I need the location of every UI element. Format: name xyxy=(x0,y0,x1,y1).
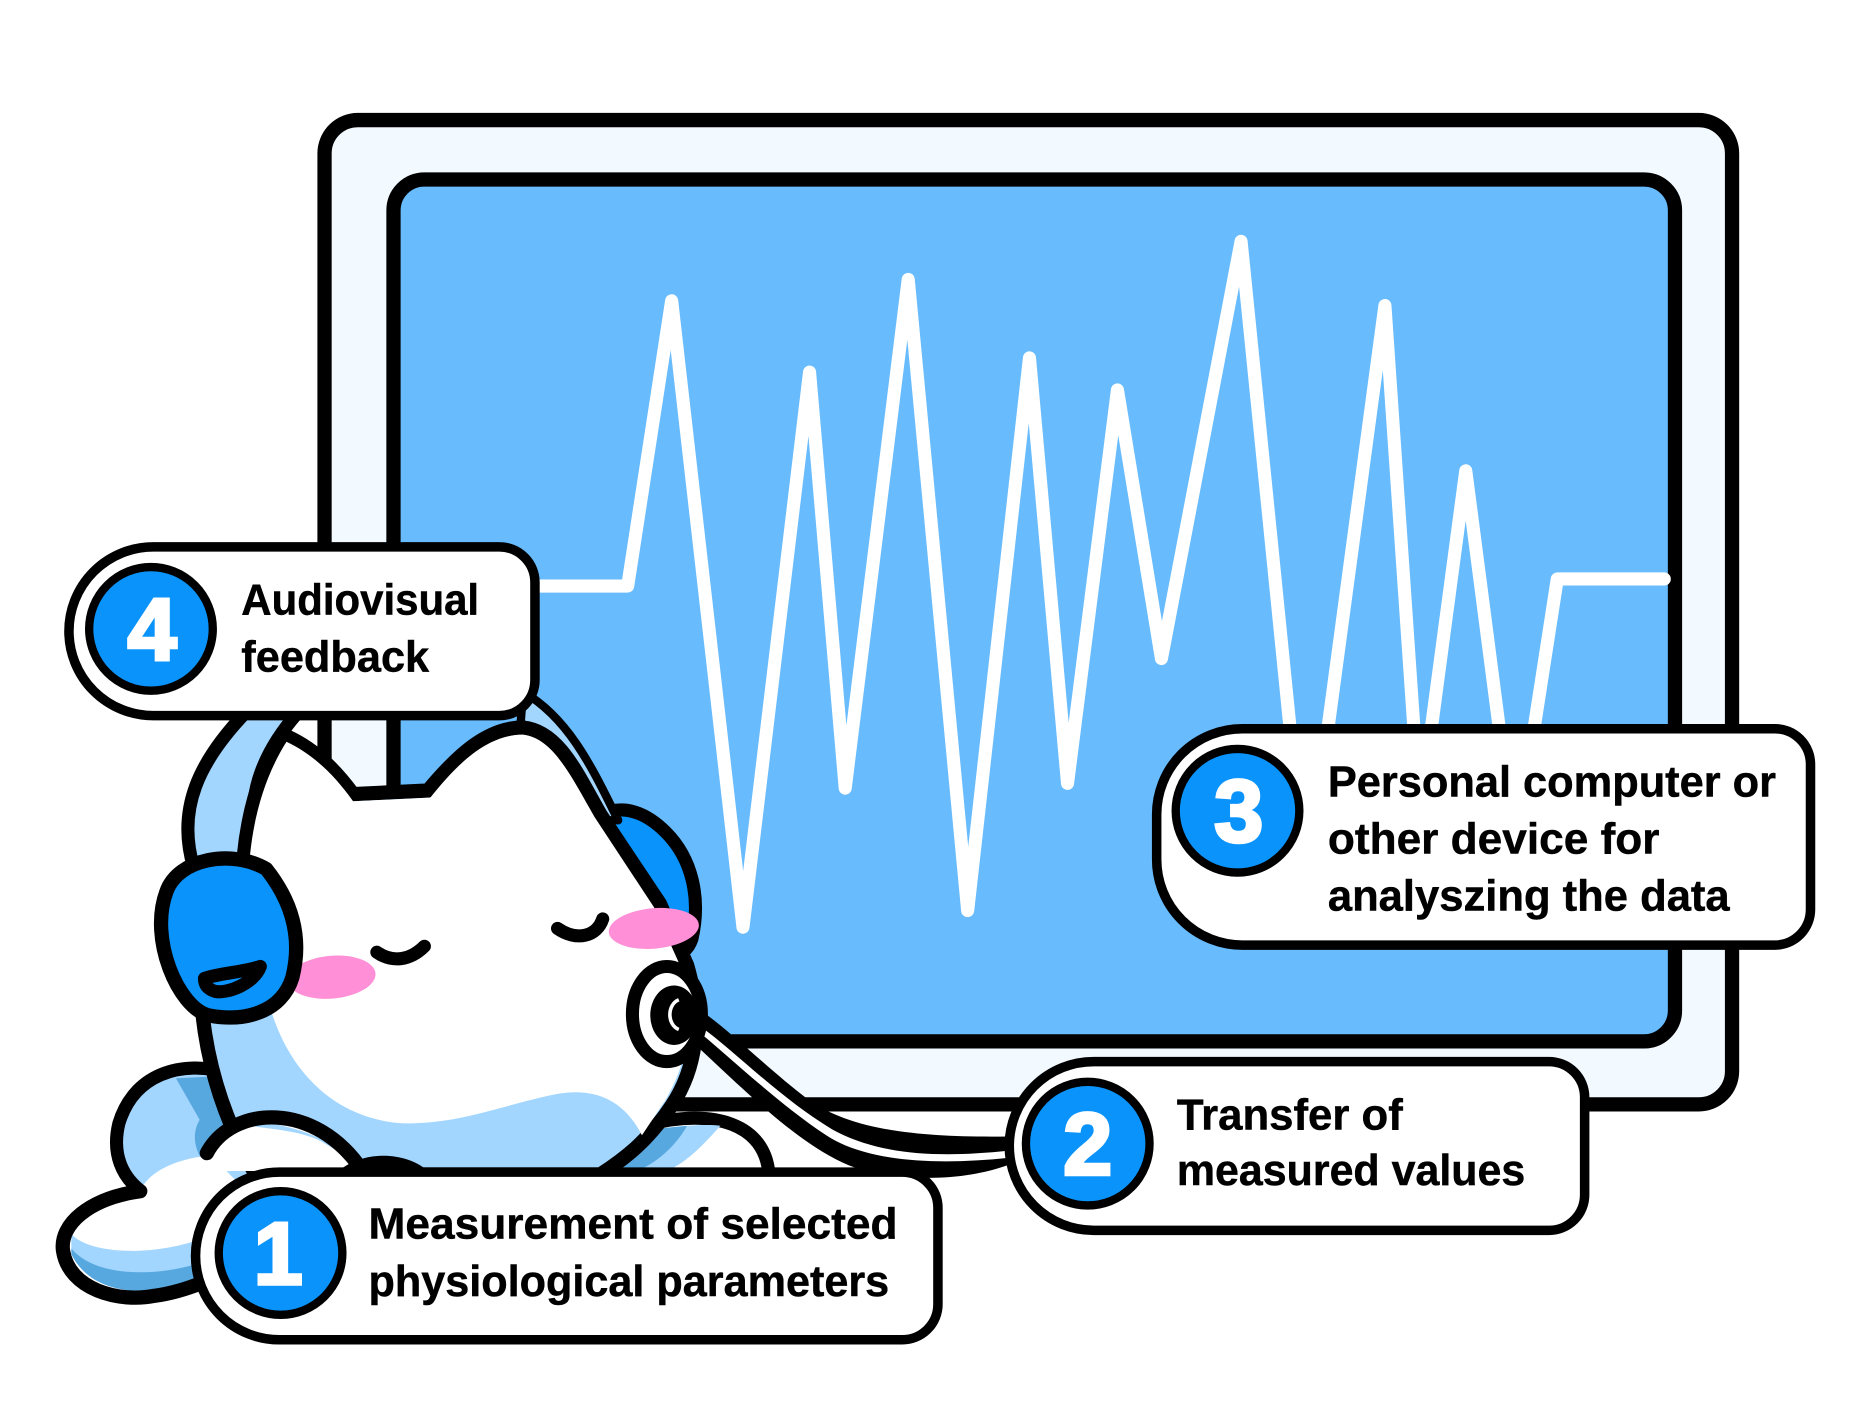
right eye xyxy=(558,919,603,936)
front paw shading xyxy=(244,1120,351,1159)
cat back paw xyxy=(63,1156,244,1298)
label text 1: physiological parameters xyxy=(369,1257,889,1306)
number badge 4 xyxy=(89,567,213,691)
white belly and face xyxy=(248,735,689,1135)
right cheek xyxy=(607,904,701,953)
label text 2: measured values xyxy=(1177,1146,1525,1195)
monitor xyxy=(325,120,1732,1104)
number badge 3: 3 xyxy=(1214,762,1263,861)
number badge 1: 1 xyxy=(254,1204,303,1303)
headband right strip xyxy=(521,692,618,820)
number badge 1 xyxy=(219,1191,342,1315)
number badge 2 xyxy=(1026,1082,1150,1205)
right paw xyxy=(594,1118,769,1177)
label 3: personal computer xyxy=(1157,729,1811,945)
monitor screen xyxy=(393,180,1675,1041)
sensor electrode xyxy=(632,966,701,1062)
label text 3: analyszing the data xyxy=(1328,872,1730,921)
label text 2: Transfer of xyxy=(1177,1090,1403,1139)
waveform line xyxy=(523,241,1664,927)
front paw outline xyxy=(207,1117,363,1171)
left eye xyxy=(377,946,424,959)
label 1: measurement of physiological parameters xyxy=(196,1172,938,1340)
number badge 3 xyxy=(1176,749,1299,873)
sensor cable xyxy=(684,1001,1008,1178)
front paw xyxy=(207,1117,363,1171)
label text 3: Personal computer or xyxy=(1328,757,1776,806)
left cheek xyxy=(286,952,377,1002)
cat tail blob xyxy=(117,1068,262,1201)
paw bump xyxy=(339,1156,428,1171)
cat character with headphones xyxy=(63,692,769,1298)
label 4: audiovisual feedback xyxy=(69,547,535,716)
label text 4: feedback xyxy=(241,633,430,682)
label text 3: other device for xyxy=(1328,815,1660,864)
cat body xyxy=(202,728,696,1175)
number badge 2: 2 xyxy=(1063,1095,1112,1194)
label 2: transfer of measured values xyxy=(1009,1062,1585,1230)
left earcup xyxy=(161,858,296,1017)
label text 1: Measurement of selected xyxy=(369,1200,898,1249)
number badge 4: 4 xyxy=(128,580,177,679)
right earcup xyxy=(600,810,695,953)
label text 4: Audiovisual xyxy=(241,576,479,625)
headband left arc xyxy=(188,713,297,868)
